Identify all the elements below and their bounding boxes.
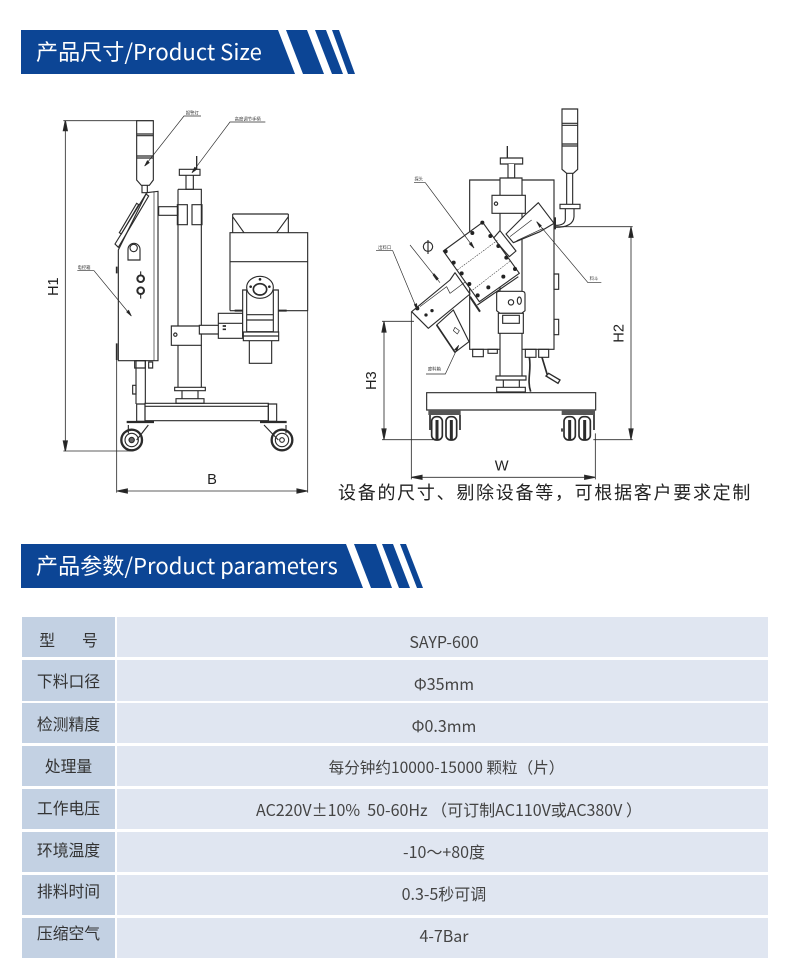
table: product parameters: [22, 617, 768, 958]
control cabinet: [115, 191, 158, 361]
dimension W: W: [495, 459, 509, 475]
row: feed diameter: 下料口径: [37, 669, 100, 692]
dimension H2: H2: [612, 324, 628, 343]
row: detection accuracy: [22, 703, 768, 743]
heading: Product parameters: [21, 544, 423, 588]
dimension H1: [46, 121, 153, 451]
row: model: 型 号: [39, 628, 98, 651]
row: compressed air: [22, 918, 768, 958]
tilted detector: [412, 203, 554, 352]
base frame and casters: [121, 361, 292, 450]
dimension H1: H1: [46, 277, 62, 296]
leader lines: 料斗: [590, 275, 599, 282]
dimension H2: [555, 227, 633, 440]
diagram: side view with dimensions H1 and B: [46, 109, 308, 494]
leader lines: 电控箱: [78, 264, 91, 271]
diagram: front view with dimensions H2, H3 and W: [364, 108, 634, 480]
leader lines: 高度调节手柄: [235, 116, 261, 123]
leader lines: 出料口: [378, 244, 391, 251]
note: customizable dimensions: 设备的尺寸、剔除设备等，可根据客户要求定制: [338, 479, 752, 505]
heading: Product Size: 产品尺寸/Product Size: [36, 35, 262, 67]
row: throughput: [22, 746, 768, 786]
warning light tower: [137, 121, 153, 193]
detector head: [199, 276, 287, 363]
dimension H3: H3: [364, 371, 380, 390]
heading: Product parameters: 产品参数/Product parameters: [36, 549, 338, 581]
leader lines: [77, 109, 265, 316]
heading: Product Size: [21, 30, 355, 74]
warning light tower: [555, 109, 580, 229]
cabinet rear panel: [470, 180, 560, 392]
row: ambient temperature: 环境温度: [37, 838, 100, 861]
dimension B: [117, 310, 308, 493]
row: compressed air: 4-7Bar: [419, 923, 469, 947]
row: model: [22, 617, 768, 657]
row: throughput: 每分钟约10000-15000 颗粒（片）: [329, 756, 564, 778]
base and casters: [427, 393, 596, 440]
row: ambient temperature: [22, 832, 768, 872]
row: discharge time: [22, 875, 768, 915]
row: feed diameter: Φ35mm: [414, 671, 474, 695]
dimension H3: [364, 321, 433, 440]
dimension B: B: [207, 472, 217, 488]
column and height handle: [159, 156, 205, 403]
leader lines: 报警灯: [186, 109, 199, 116]
row: discharge time: 0.3-5秒可调: [402, 881, 486, 905]
row: feed diameter: [22, 660, 768, 701]
row: compressed air: 压缩空气: [37, 921, 100, 944]
row: discharge time: 排料时间: [37, 879, 100, 902]
dimension W: [411, 312, 595, 479]
row: detection accuracy: 检测精度: [37, 712, 100, 735]
hopper: [506, 203, 554, 243]
hopper box: [230, 214, 308, 311]
row: voltage: [22, 789, 768, 829]
leader lines: [376, 176, 601, 374]
row: ambient temperature: -10～+80度: [403, 839, 485, 863]
column and height handle: [492, 146, 526, 392]
row: voltage: 工作电压: [37, 796, 100, 819]
row: throughput: 处理量: [45, 754, 92, 777]
diameter symbol: [410, 240, 440, 283]
row: voltage: AC220V±10% 50-60Hz （可订制AC110V或AC380V ）: [256, 797, 642, 821]
leader lines: 探头: [414, 176, 424, 183]
leader lines: 废料箱: [428, 366, 441, 373]
row: model: SAYP-600: [409, 629, 479, 653]
row: detection accuracy: Φ0.3mm: [412, 713, 476, 737]
